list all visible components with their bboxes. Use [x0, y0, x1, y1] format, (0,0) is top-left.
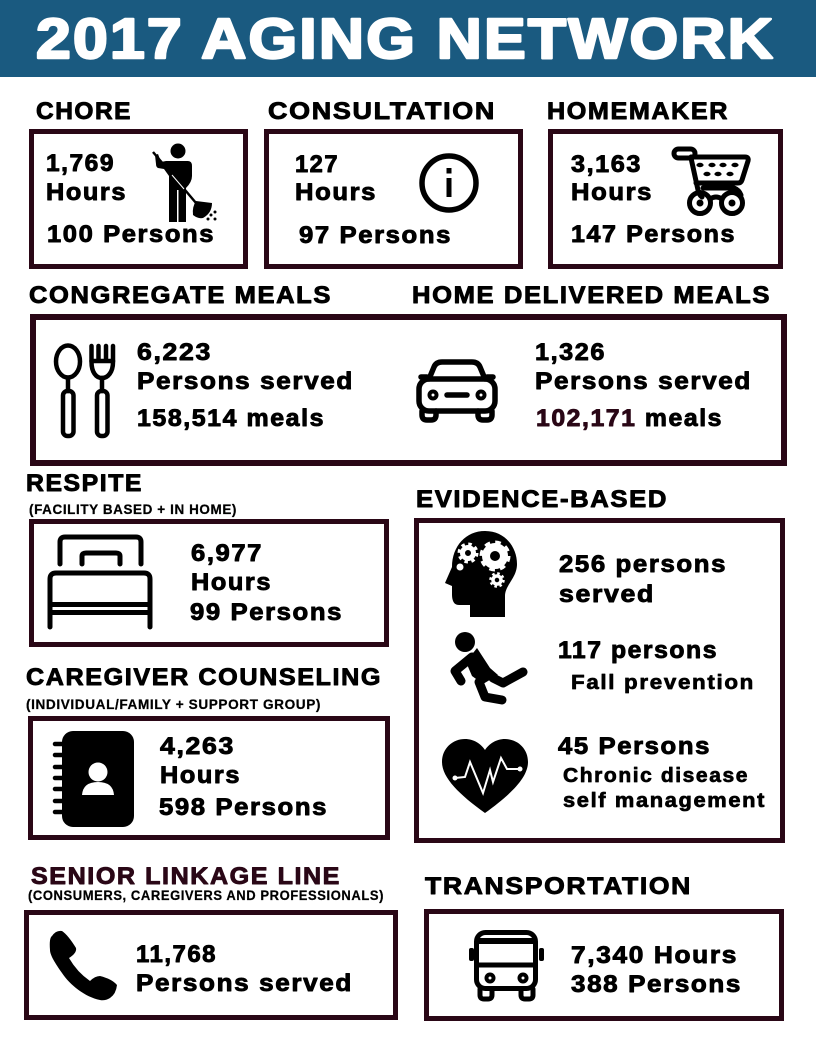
panel: senior linkage line	[26, 863, 396, 1018]
panel: evidence-based	[416, 486, 782, 840]
panel: homemaker	[547, 98, 780, 266]
subheading: respite: (FACILITY BASED + IN HOME)	[29, 502, 237, 517]
congregate persons: 6,223	[137, 339, 212, 366]
heading: senior linkage line: SENIOR LINKAGE LINE	[31, 863, 341, 890]
icon: bus	[469, 932, 544, 999]
icon: address book	[55, 731, 134, 827]
fall prevention label: Fall prevention	[571, 672, 755, 694]
senior linkage persons: 11,768	[136, 941, 217, 968]
box: evidence-based	[416, 520, 782, 840]
icon: spoon	[56, 346, 80, 436]
chronic disease label line 1: Chronic disease	[563, 765, 749, 787]
icon: falling person	[455, 632, 523, 700]
icon: bed	[50, 537, 150, 627]
home delivered meals count: 102,171 meals	[536, 405, 723, 432]
caregiver hours label: Hours	[160, 762, 241, 789]
respite hours: 6,977	[191, 540, 263, 567]
chronic disease count: 45 Persons	[558, 733, 711, 760]
consultation hours label: Hours	[295, 179, 377, 206]
icon: fork	[92, 346, 113, 436]
chore hours label: Hours	[46, 179, 127, 206]
transportation hours: 7,340 Hours	[571, 942, 738, 969]
box: transportation	[426, 912, 782, 1018]
box: consultation	[266, 132, 520, 266]
home delivered persons: 1,326	[535, 339, 606, 366]
title: 2017 AGING NETWORK	[36, 7, 775, 71]
subheading: senior linkage line: (CONSUMERS, CAREGIVERS AND PROFESSIONALS)	[28, 888, 384, 903]
heading: home delivered meals: HOME DELIVERED MEALS	[412, 282, 771, 309]
icon: info	[422, 156, 476, 210]
box: respite	[32, 522, 386, 644]
heading: congregate meals: CONGREGATE MEALS	[29, 282, 332, 309]
congregate meals count: 158,514 meals	[137, 405, 325, 432]
icon: head with gears	[445, 531, 517, 617]
panel: transportation	[425, 873, 782, 1018]
consultation persons: 97 Persons	[299, 222, 452, 249]
icon: person sweeping	[153, 144, 216, 222]
heading: caregiver counseling: CAREGIVER COUNSELING	[26, 664, 382, 691]
icon: shopping cart	[674, 149, 748, 214]
senior linkage persons label: Persons served	[136, 970, 353, 997]
panel: respite	[26, 470, 386, 644]
congregate persons label: Persons served	[137, 368, 354, 395]
home delivered persons label: Persons served	[535, 368, 752, 395]
title banner	[0, 0, 816, 77]
persons served label: served	[559, 581, 655, 608]
respite hours label: Hours	[191, 569, 272, 596]
box: caregiver counseling	[30, 718, 388, 838]
homemaker hours: 3,163	[571, 151, 642, 178]
heading: consultation: CONSULTATION	[268, 98, 496, 125]
fall prevention count: 117 persons	[558, 637, 718, 664]
box: senior linkage line	[26, 912, 396, 1018]
persons served: 256 persons	[559, 551, 727, 578]
heading: transportation: TRANSPORTATION	[425, 873, 692, 900]
box: meals	[33, 317, 784, 463]
homemaker persons: 147 Persons	[571, 221, 736, 248]
chore persons: 100 Persons	[47, 221, 215, 248]
box: chore	[32, 132, 246, 266]
subheading: caregiver counseling: (INDIVIDUAL/FAMILY + SUPPORT GROUP)	[26, 697, 321, 712]
icon: heart with pulse	[442, 739, 528, 813]
panel: consultation	[266, 98, 520, 266]
panel: caregiver counseling	[26, 664, 388, 838]
panel: chore	[32, 98, 246, 266]
icon: phone	[50, 931, 117, 1000]
consultation hours: 127	[295, 151, 339, 178]
heading: chore: CHORE	[36, 98, 132, 125]
heading: homemaker: HOMEMAKER	[547, 98, 729, 125]
homemaker hours label: Hours	[571, 179, 653, 206]
heading: respite: RESPITE	[26, 470, 143, 497]
chore hours: 1,769	[46, 150, 115, 177]
box: homemaker	[550, 132, 780, 266]
caregiver persons: 598 Persons	[159, 794, 328, 821]
panel: meals	[29, 282, 784, 463]
respite persons: 99 Persons	[190, 599, 343, 626]
chronic disease label line 2: self management	[563, 790, 766, 812]
icon: car	[419, 362, 495, 420]
heading: evidence-based: EVIDENCE-BASED	[416, 486, 668, 513]
transportation persons: 388 Persons	[571, 971, 742, 998]
caregiver hours: 4,263	[160, 733, 235, 760]
